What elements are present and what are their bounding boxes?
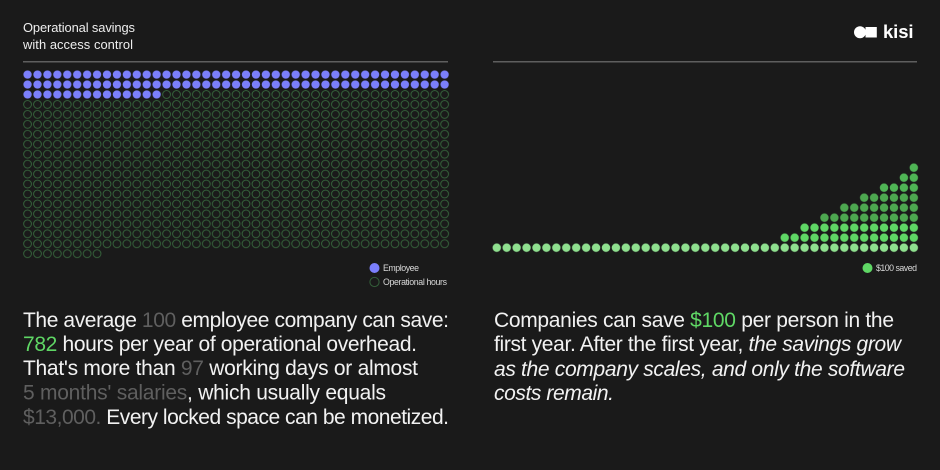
title: Operational savings [23, 20, 135, 35]
text block: left summary: That's more than 97 working days or almost [23, 357, 418, 380]
title: with access control [22, 37, 133, 52]
text block: left summary: 5 months' salaries, which usually equals [23, 382, 386, 404]
legend: employee and operational hours [370, 263, 448, 287]
left header rule [23, 61, 448, 62]
icon: kisi logo: kisi [883, 21, 914, 42]
title [22, 20, 135, 52]
chart: cumulative savings staircase [492, 163, 919, 253]
text block: right summary: costs remain. [494, 382, 614, 405]
chart: employee and operational hours dot grid [23, 70, 450, 259]
text block: right summary: first year. After the first year, the savings grow [494, 333, 903, 356]
text block: right summary: Companies can save $100 per person in the [494, 309, 894, 332]
legend item: employee: Employee [383, 263, 419, 273]
operational hours dots [23, 90, 450, 259]
text block: left summary: $13,000. Every locked space can be monetized. [23, 406, 449, 429]
text block: left summary: The average 100 employee company can save: [23, 309, 449, 332]
text block: right summary: as the company scales, and only the software [494, 358, 905, 381]
legend item: operational hours: Operational hours [383, 277, 448, 287]
text block: right summary [494, 309, 905, 405]
text block: left summary [23, 309, 449, 429]
employee dots [23, 70, 450, 99]
right header rule [493, 61, 917, 62]
text block: left summary: 782 hours per year of operational overhead. [23, 333, 417, 356]
icon: kisi logo [854, 21, 914, 42]
legend: $100 saved: $100 saved [876, 263, 917, 273]
